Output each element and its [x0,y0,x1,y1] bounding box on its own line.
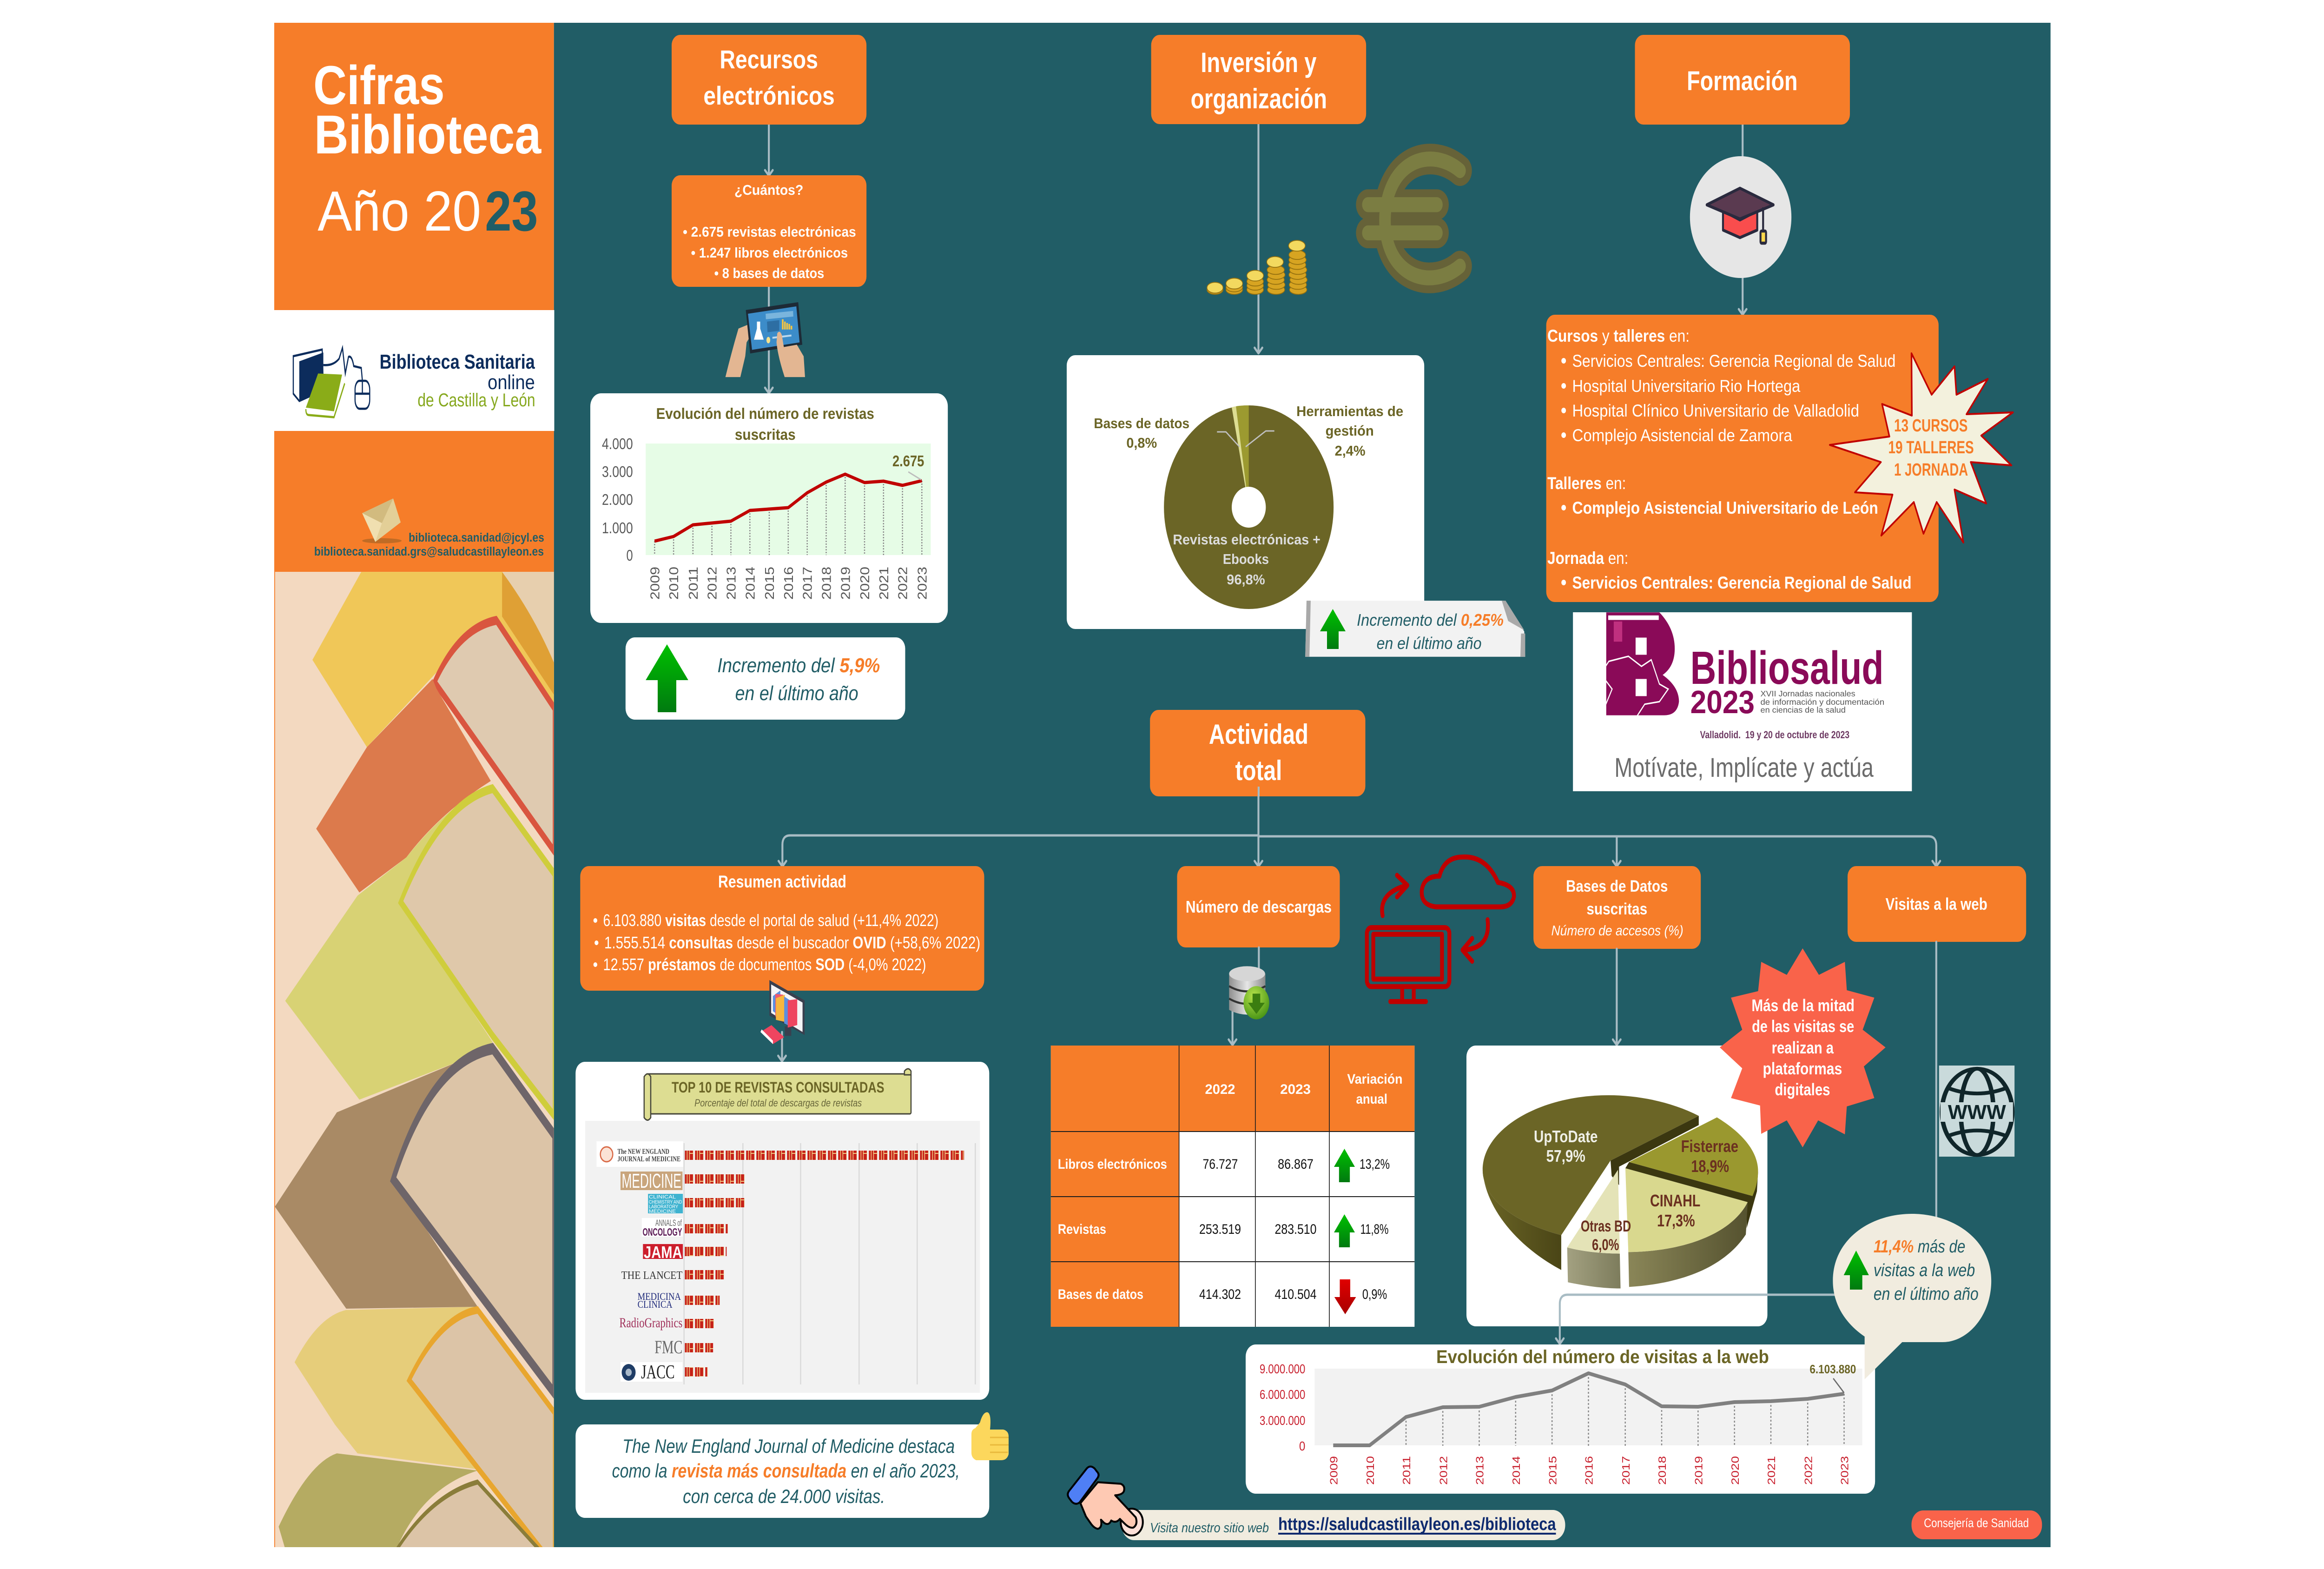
panel: chart revistas suscritas [590,393,948,623]
logo: Annals of Oncology: ONCOLOGY [642,1226,682,1238]
callout: NEJM destaca: con cerca de 24.000 visitas. [683,1486,885,1508]
label: revistas: Ebooks [1223,551,1269,568]
panel: resumen actividad: 6.103.880 visitas desde el portal de salud (+11,4% 2022) [603,911,938,930]
logo: Clinical Chemistry: LABORATORY [649,1204,678,1210]
logo: Medicine: MEDICINE [622,1169,681,1192]
y axis labels [1260,1362,1305,1454]
image: Bibliosalud 2023 logo: en ciencias de la salud [1761,705,1846,715]
panel: cuántos: • 8 bases de datos [714,265,824,282]
icon: euro [1368,159,1460,278]
panel: resumen actividad: 12.557 préstamos de documentos SOD (-4,0% 2022) [603,955,926,974]
row: bases de datos: 414.302 [1199,1286,1241,1302]
panel: recursos electrónicos header: Recursos [720,45,818,74]
callout: NEJM destaca [575,1424,989,1518]
logo: JACC [621,1362,682,1383]
connector: descargas to table [1228,947,1259,1045]
y axis labels: 0 [627,548,633,564]
logo: FMC: FMC [654,1337,682,1357]
callout: incremento 0,25%: Incremento del 0,25% [1357,611,1504,630]
logo: Medicina Clinica [638,1291,681,1310]
icon: database download [1229,966,1269,1020]
icon: green arrow up [646,644,688,712]
panel: formación header [1635,35,1850,125]
image: Bibliosalud 2023 logo: Motívate, Implícate y actúa [1614,753,1874,783]
email contacts [314,531,544,559]
image: Bibliosalud 2023 logo [1573,612,1912,791]
panel: pie chart inversión [1067,355,1424,629]
label: herramientas: gestión [1326,423,1374,439]
x axis labels: 2016 [782,567,796,600]
callout: speech bubble 11,4%: visitas a la web [1874,1260,1975,1280]
callout: starburst plataformas digitales: de las visitas se [1752,1017,1854,1036]
logo: JACC: JACC [641,1362,675,1383]
label: CINAHL: CINAHL [1650,1192,1700,1211]
panel: chart visitas web [1246,1344,1875,1494]
callout: starburst cursos talleres jornada: 1 JORNADA [1894,460,1968,480]
logo: NEJM: The NEW ENGLAND [617,1148,669,1156]
row: revistas: Revistas [1058,1221,1106,1237]
logo: JAMA: JAMA [644,1243,682,1262]
panel: inversión header: organización [1191,83,1327,114]
line chart [1333,1373,1844,1445]
table header: Variación [1347,1071,1402,1087]
heading: suscritas [735,427,796,444]
value label [892,453,924,480]
callout: starburst plataformas digitales: Más de la mitad [1751,996,1855,1015]
panel: recursos electrónicos header: electrónicos [703,81,835,110]
text: talleres: Complejo Asistencial Universitario de León [1572,498,1878,518]
row: revistas [1058,1214,1389,1247]
x axis labels: 2009 [1328,1456,1340,1485]
title: 23 [485,179,538,243]
value label: 6.103.880 [1809,1363,1856,1377]
heading: Evolución del número de revistas [656,406,874,423]
x axis labels [1328,1456,1851,1485]
connector: bases to pie [1613,949,1621,1045]
x axis labels: 2023 [916,567,930,600]
connector tree: actividad total [779,787,1940,867]
icon: pointing hand [1068,1467,1143,1536]
heading: Evolución del número de visitas a la web [1436,1346,1769,1367]
callout: starburst cursos talleres jornada: 13 CURSOS [1894,416,1967,436]
line chart [654,474,922,541]
x axis labels: 2011 [687,567,700,600]
text: cursos y talleres: Cursos y talleres en: [1547,326,1690,346]
logo: Biblioteca Sanitaria online: online [488,371,535,394]
panel: resumen actividad: Resumen actividad [718,872,846,892]
logo: Clinical Chemistry: CHEMISTRY AND [649,1199,682,1205]
table header [1205,1071,1403,1107]
row: revistas: 11,8% [1360,1221,1389,1237]
heading [656,406,874,444]
label: herramientas [1296,404,1403,459]
x axis labels: 2018 [820,567,834,600]
image: Bibliosalud 2023 logo: 2023 [1690,684,1755,720]
x axis labels: 2021 [877,567,891,600]
text: jornada: Servicios Centrales: Gerencia Regional de Salud [1572,573,1912,593]
panel: bases de datos header: suscritas [1586,900,1647,918]
background panel [554,23,2051,1547]
y axis labels: 0 [1299,1439,1305,1454]
image: Bibliosalud 2023 logo: Bibliosalud [1690,642,1883,694]
link pill: sitio web [1122,1510,1565,1540]
text: cursos y talleres: Hospital Clínico Universitario de Valladolid [1572,401,1859,421]
x axis labels: 2013 [725,567,739,600]
title: Año 20 [317,179,481,243]
icon: coin stacks [1207,240,1307,294]
callout: starburst plataformas digitales: digitales [1775,1080,1830,1099]
panel: cuántos: ¿Cuántos? [734,182,803,199]
panel: formación header: Formación [1687,66,1798,96]
panel: cuántos: • 2.675 revistas electrónicas [683,224,856,240]
text: cursos y talleres: Hospital Universitario Rio Hortega [1572,377,1800,396]
image: Bibliosalud 2023 logo: Valladolid. 19 y 20 de octubre de 2023 [1700,730,1849,741]
image: colored books [275,572,554,1552]
callout: starburst cursos talleres jornada [1830,353,2013,543]
label: UpToDate [1534,1127,1598,1166]
x axis labels: 2013 [1474,1456,1486,1485]
x axis labels: 2022 [1802,1456,1815,1485]
label: CINAHL: 17,3% [1657,1212,1695,1231]
row: libros [1058,1149,1390,1182]
label: bases de datos [1094,416,1189,451]
text: jornada [1547,549,1911,593]
panel: cuántos [672,175,866,287]
logo: Annals of Oncology: ANNALS of [655,1218,682,1228]
value label [1809,1363,1856,1393]
title [313,55,542,243]
x axis labels: 2021 [1766,1456,1778,1485]
x axis labels: 2019 [839,567,853,600]
icon: www globe [1939,1066,2014,1157]
connector: formación column [1739,125,1747,315]
label: revistas: 96,8% [1227,572,1265,588]
logo: Annals of Oncology [642,1218,683,1238]
y axis labels [602,436,633,564]
connector: recursos column [765,125,772,393]
panel: cuántos: • 1.247 libros electrónicos [691,245,848,261]
label: Otras BD: 6,0% [1592,1236,1619,1254]
panel: inversión header: Inversión y [1201,47,1317,78]
row: libros: 13,2% [1360,1156,1390,1172]
link pill: sitio web: Visita nuestro sitio web [1150,1520,1269,1536]
connector: visitas to bubble [1935,942,1937,1218]
badge: Consejería de Sanidad: Consejería de Sanidad [1924,1516,2029,1530]
x axis labels: 2019 [1693,1456,1705,1485]
text: talleres [1547,474,1878,518]
icon: thumbs up [971,1412,1009,1460]
logo: NEJM: JOURNAL of MEDICINE [617,1155,680,1163]
label: Otras BD [1581,1218,1631,1254]
badge: Consejería de Sanidad [1911,1510,2042,1539]
logo: Clinical Chemistry: CLINICAL [649,1194,676,1200]
value label: 2.675 [892,453,924,470]
callout: speech bubble 11,4%: en el último año [1874,1284,1979,1304]
title: Biblioteca [314,105,542,166]
panel: visitas a la web header [1848,866,2026,942]
logo: RadioGraphics: RadioGraphics [619,1315,682,1331]
label: herramientas: 2,4% [1335,443,1366,459]
text: cursos y talleres: Complejo Asistencial de Zamora [1572,426,1792,445]
panel: actividad total header [1150,710,1366,796]
x axis labels: 2011 [1401,1456,1413,1485]
text: jornada: Jornada en: [1547,549,1628,568]
email contacts: biblioteca.sanidad.grs@saludcastillayleon.es [314,545,544,559]
table header: 2022 [1205,1081,1235,1097]
panel: top 10 revistas [575,1062,989,1400]
panel: actividad total header: total [1235,755,1282,786]
image: Bibliosalud 2023 logo: XVII Jornadas nacionales [1761,689,1855,698]
label: revistas [1173,532,1320,588]
banner: scroll title: TOP 10 DE REVISTAS CONSULTADAS [672,1079,885,1096]
row: revistas: 283.510 [1274,1221,1316,1237]
x axis labels: 2014 [1511,1456,1522,1485]
panel: resumen actividad: 1.555.514 consultas desde el buscador OVID (+58,6% 2022) [604,933,980,953]
row: bases de datos: 0,9% [1362,1286,1387,1302]
logo: Clinical Chemistry [648,1194,683,1214]
label: Fisterrae: Fisterrae [1681,1137,1738,1156]
link pill: sitio web: https://saludcastillayleon.es/biblioteca [1278,1514,1556,1534]
label: UpToDate: UpToDate [1534,1127,1598,1146]
icon: www globe: WWW [1948,1100,2007,1124]
logo: Clinical Chemistry: MEDICINE [649,1209,676,1214]
logo: Biblioteca Sanitaria online [274,310,554,431]
panel: bases de datos header: Número de accesos (%) [1552,923,1684,939]
text: talleres: Talleres en: [1547,474,1626,493]
y axis labels: 9.000.000 [1260,1362,1305,1377]
panel: 3D pie chart bases de datos [1466,1046,1767,1326]
callout: starburst plataformas digitales [1720,948,1886,1147]
row: libros: 76.727 [1203,1156,1238,1172]
label: Fisterrae [1681,1137,1738,1176]
panel: bases de datos header: Bases de Datos [1566,877,1668,895]
x axis labels: 2012 [1438,1456,1450,1485]
donut chart [1164,405,1334,609]
icon: graduation cap [1690,156,1791,278]
icon: cloud and monitor sync [1367,857,1514,1001]
y axis labels: 6.000.000 [1260,1388,1305,1402]
label: bases de datos: Bases de datos [1094,416,1189,432]
pie chart [1483,1095,1758,1289]
x axis labels: 2020 [1730,1456,1741,1485]
x axis labels [648,567,930,600]
icon: envelope [362,498,402,543]
callout: incremento 0,25% [1305,601,1525,657]
banner: scroll title: Porcentaje del total de descargas de revistas [694,1098,862,1109]
title: Cifras [313,55,445,116]
x axis labels: 2015 [763,567,777,600]
panel: actividad total header: Actividad [1209,719,1308,750]
x axis labels: 2010 [1365,1456,1376,1485]
row: bases de datos [1058,1279,1387,1314]
panel: inversión header [1151,35,1366,124]
callout: speech bubble 11,4% [1833,1214,1991,1379]
panel: número de descargas header [1177,866,1340,947]
callout: NEJM destaca: como la revista más consultada en el año 2023, [612,1460,960,1482]
icon: green arrow up [1844,1251,1869,1290]
panel: recursos electrónicos header [672,35,866,125]
callout: incremento 5,9% [626,637,905,720]
x axis labels: 2009 [648,567,662,600]
panel: left sidebar [274,23,554,1552]
panel: visitas a la web header: Visitas a la web [1886,895,1987,914]
x axis labels: 2012 [706,567,720,600]
logo: Biblioteca Sanitaria online: de Castilla y León [417,390,535,410]
callout: starburst plataformas digitales: realizan a [1772,1039,1834,1058]
label: Otras BD: Otras BD [1581,1218,1631,1235]
callout: incremento 5,9%: Incremento del 5,9% [717,654,880,677]
label: herramientas: Herramientas de [1296,404,1403,420]
label: Fisterrae: 18,9% [1691,1157,1729,1176]
label: revistas: Revistas electrónicas + [1173,532,1320,548]
x axis labels: 2015 [1547,1456,1559,1485]
x axis labels: 2017 [1620,1456,1632,1485]
icon: books on monitor [760,980,805,1044]
label: bases de datos: 0,8% [1126,435,1157,451]
panel: bases de datos header [1533,866,1701,949]
image: Bibliosalud 2023 logo: de información y documentación [1761,697,1884,707]
y axis labels: 3.000.000 [1260,1414,1305,1428]
panel: resumen actividad [580,866,984,991]
chart: pictogram bars [585,1121,980,1393]
x axis labels: 2023 [1839,1456,1851,1485]
logo: Medicina Clinica: MEDICINA [638,1291,681,1302]
row: bases de datos: Bases de datos [1058,1286,1143,1302]
logo: Medicina Clinica: CLINICA [638,1299,673,1310]
y axis labels: 3.000 [602,464,633,481]
connector: inversión column [1254,124,1262,353]
callout: incremento 0,25%: en el último año [1377,634,1482,653]
logo: The Lancet: THE LANCET [621,1269,683,1281]
row: revistas: 253.519 [1199,1221,1241,1237]
table header: 2023 [1280,1081,1311,1097]
x axis labels: 2022 [896,567,910,600]
banner: scroll title [644,1069,911,1120]
callout: incremento 5,9%: en el último año [735,682,858,705]
x axis labels: 2014 [744,567,758,600]
callout: NEJM destaca: The New England Journal of Medicine destaca [622,1436,955,1457]
email contacts: biblioteca.sanidad@jcyl.es [409,531,544,545]
panel: cursos y talleres [1546,315,1939,602]
row: libros: 86.867 [1278,1156,1314,1172]
x axis labels: 2016 [1584,1456,1595,1485]
logo: NEJM [596,1141,683,1167]
x axis labels: 2010 [667,567,681,600]
label: UpToDate: 57,9% [1546,1147,1585,1166]
icon: tablet with hands [726,302,805,377]
logo: Biblioteca Sanitaria online: Biblioteca Sanitaria [380,350,535,373]
y axis labels: 1.000 [602,520,633,537]
callout: starburst cursos talleres jornada: 19 TALLERES [1888,437,1974,457]
x axis labels: 2018 [1657,1456,1669,1485]
icon: green arrow up [1320,609,1346,649]
x axis labels: 2020 [858,567,872,600]
text: cursos y talleres [1547,326,1895,445]
panel: número de descargas header: Número de descargas [1186,898,1332,917]
connector: resumen to top 10 [778,1032,786,1061]
table header: anual [1356,1091,1387,1107]
text: cursos y talleres: Servicios Centrales: Gerencia Regional de Salud [1572,351,1895,371]
row: libros: Libros electrónicos [1058,1156,1167,1172]
table: descargas [1051,1046,1414,1327]
callout: speech bubble 11,4%: 11,4% más de [1874,1237,1965,1257]
row: bases de datos: 410.504 [1274,1286,1316,1302]
y axis labels: 4.000 [602,436,633,453]
connector: bubble to visits chart [1556,1295,1840,1344]
x axis labels: 2017 [801,567,815,600]
label: CINAHL [1650,1192,1700,1231]
y axis labels: 2.000 [602,492,633,509]
callout: starburst plataformas digitales: plataformas [1763,1059,1842,1079]
